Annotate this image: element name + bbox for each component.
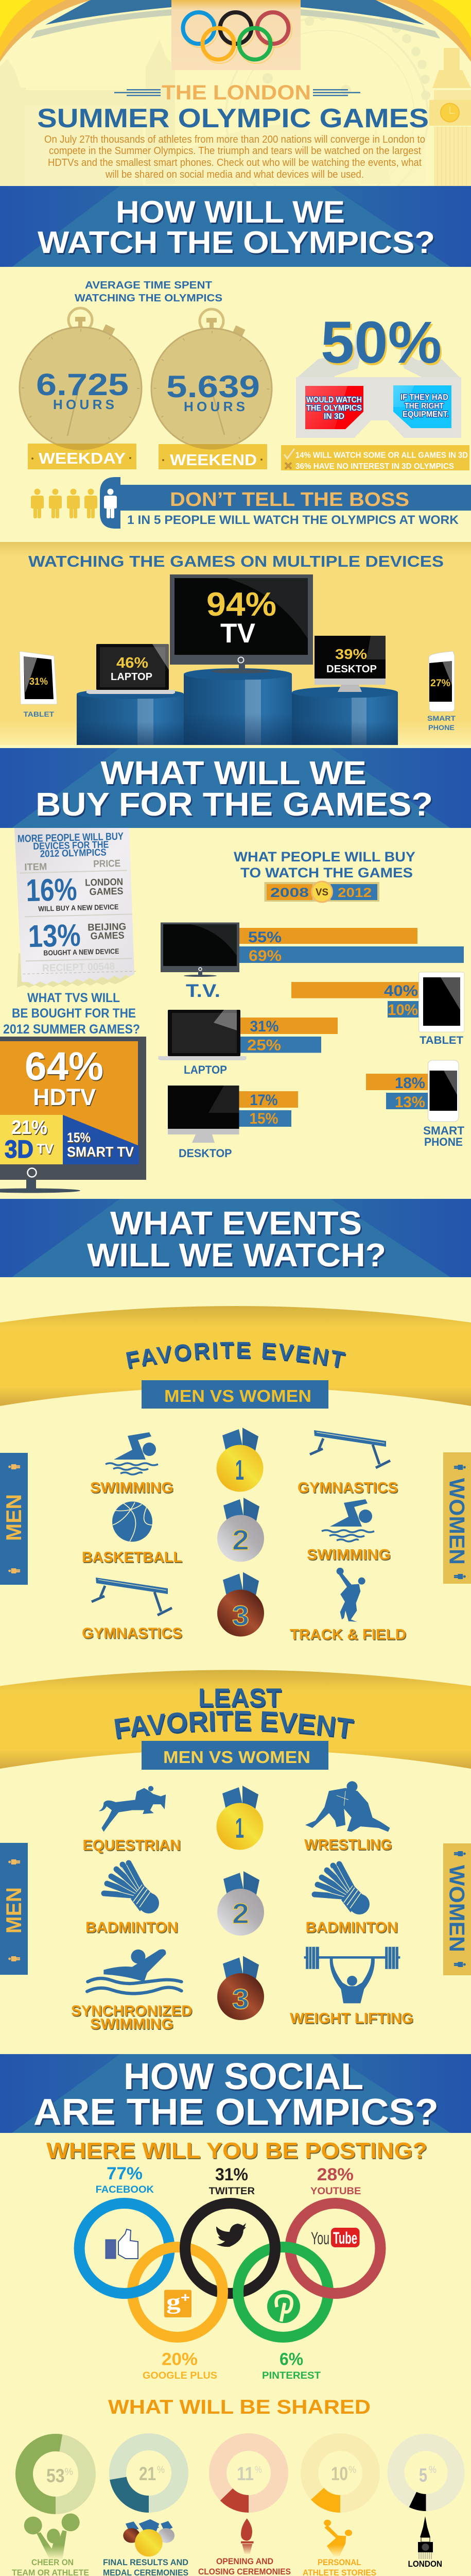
heading: favorite event: FAVORITE EVENT bbox=[126, 1342, 346, 1369]
donut: london 5%: 5 bbox=[419, 2465, 427, 2486]
intro paragraph: will be shared on social media and what devices will be used. bbox=[105, 169, 364, 180]
icon: twitter bird bbox=[216, 2223, 246, 2247]
stat: weekend hours: HOURS bbox=[184, 399, 245, 414]
bars: laptop bbox=[240, 1018, 338, 1054]
callout: don't tell the boss bbox=[100, 477, 471, 529]
receipt panel: BOUGHT A NEW DEVICE bbox=[43, 947, 119, 957]
event: men gymnastics: GYMNASTICS bbox=[82, 1625, 182, 1641]
receipt panel: GAMES bbox=[89, 886, 124, 897]
heading: what people will buy: WHAT PEOPLE WILL BUY bbox=[234, 849, 415, 865]
stat: facebook: 77% bbox=[107, 2164, 143, 2183]
icon: medals bbox=[123, 2519, 175, 2556]
event: men gymnastics bbox=[82, 1578, 182, 1641]
event: women track and field: TRACK & FIELD bbox=[290, 1626, 406, 1643]
heading: least favorite event: FAVORITE EVENT bbox=[114, 1710, 355, 1740]
bars: tablet: 40% bbox=[384, 982, 418, 999]
legend: 2008 vs 2012 bbox=[265, 882, 379, 902]
receipt panel: 13% bbox=[28, 918, 81, 954]
donut: medals 21% bbox=[117, 2442, 180, 2504]
stat: facebook bbox=[96, 2164, 154, 2195]
chart: tv types in monitor: 3D bbox=[5, 1136, 33, 1163]
event: men badminton bbox=[85, 1863, 178, 1936]
bars: desktop: 17% bbox=[250, 1092, 278, 1109]
receipt panel: GAMES bbox=[90, 930, 125, 942]
chart: tv types in monitor: 21% bbox=[11, 1117, 47, 1139]
intro paragraph: HDTVs and the smallest smart phones. Check out who will be watching the events, what bbox=[48, 157, 422, 168]
event: women gymnastics: GYMNASTICS bbox=[298, 1480, 398, 1496]
stat: 50 percent: 50% bbox=[321, 310, 442, 376]
bars: tablet: 10% bbox=[388, 1002, 418, 1019]
receipt panel: RECIEPT 00548 bbox=[42, 961, 115, 974]
icon: cheerleader bbox=[24, 2513, 80, 2560]
chart: tv types in monitor bbox=[0, 1037, 146, 1193]
device: laptop 46%: 46% bbox=[116, 655, 148, 671]
label: smart phone bbox=[427, 714, 456, 732]
device: tablet 31%: 31% bbox=[29, 676, 48, 687]
bars: laptop: 31% bbox=[250, 1018, 279, 1035]
device: desktop 39%: DESKTOP bbox=[326, 664, 377, 675]
medal: silver least favorite: 2 bbox=[232, 1897, 249, 1929]
bars: tv: 69% bbox=[249, 947, 282, 964]
donut: athlete stories 10% bbox=[309, 2442, 371, 2504]
donut: ceremonies 11%: 11 bbox=[237, 2463, 254, 2484]
device: tv 94%: 94% bbox=[206, 585, 276, 623]
label: london: LONDON bbox=[408, 2559, 442, 2569]
top curtain left bbox=[0, 0, 171, 62]
stat: youtube bbox=[310, 2165, 361, 2197]
label: cheer on team or athlete: CHEER ON bbox=[31, 2557, 74, 2567]
icon: google plus: g bbox=[166, 2291, 181, 2314]
weekday label bbox=[28, 444, 136, 469]
heading: what people will buy: TO WATCH THE GAMES bbox=[240, 865, 413, 880]
icon: facebook thumb bbox=[106, 2229, 138, 2259]
side tab: women bbox=[443, 1452, 471, 1584]
heading: average time spent: AVERAGE TIME SPENT bbox=[85, 280, 212, 291]
people icons: 1 in 5 bbox=[31, 488, 97, 518]
event: men equestrian: EQUESTRIAN bbox=[82, 1837, 181, 1854]
intro paragraph bbox=[44, 134, 425, 180]
panel: multiple devices bbox=[0, 542, 471, 745]
device: tablet bbox=[419, 972, 464, 1032]
medal: bronze least favorite bbox=[217, 1956, 264, 2020]
chart: tv types in monitor: 64% bbox=[25, 1044, 103, 1089]
stat: weekday hours: 6.725 bbox=[36, 367, 129, 402]
label: smart phone bbox=[423, 1124, 465, 1148]
medal: gold least favorite: 1 bbox=[235, 1812, 244, 1844]
stat: twitter: TWITTER bbox=[209, 2186, 255, 2197]
bars: desktop bbox=[239, 1091, 298, 1127]
label: smart phone: SMART bbox=[423, 1124, 465, 1137]
donut: london 5%: % bbox=[429, 2465, 437, 2476]
donut: cheer 53% bbox=[24, 2443, 87, 2505]
label: final results: FINAL RESULTS AND bbox=[103, 2557, 188, 2567]
red lens text: IN 3D bbox=[324, 412, 344, 421]
bars: smart phone: 18% bbox=[395, 1075, 425, 1092]
device: smart phone 27%: 27% bbox=[430, 678, 450, 689]
blue lens text: THE RIGHT bbox=[405, 402, 444, 411]
blue lens text bbox=[400, 393, 449, 419]
heading: what tvs will be bought bbox=[3, 991, 140, 1037]
device: desktop bbox=[168, 1086, 239, 1143]
device: laptop bbox=[159, 1010, 246, 1060]
stat: weekday hours bbox=[36, 367, 129, 412]
event: men synchronized swimming: SWIMMING bbox=[90, 2016, 173, 2032]
receipt panel: BEIJING bbox=[88, 922, 126, 933]
donut: cheer 53%: 53 bbox=[46, 2465, 65, 2486]
red lens text: THE OLYMPICS bbox=[306, 404, 362, 413]
receipt panel: 16% bbox=[26, 872, 77, 908]
icon: youtube logo: You bbox=[311, 2229, 329, 2248]
donut: medals 21%: % bbox=[157, 2465, 165, 2476]
label: tablet: TABLET bbox=[24, 710, 54, 718]
banner: what events: WHAT EVENTS bbox=[110, 1205, 362, 1242]
podium: tv cylinder bbox=[184, 668, 292, 745]
device: tablet 31% bbox=[20, 651, 57, 704]
medal: gold least favorite bbox=[216, 1786, 264, 1850]
medal: silver least favorite bbox=[217, 1871, 264, 1936]
chart: tv types in monitor: HDTV bbox=[33, 1084, 96, 1110]
label: t.v.: T.V. bbox=[186, 981, 220, 1001]
arc band: favorite event bbox=[0, 1306, 471, 1406]
stat: facebook: FACEBOOK bbox=[96, 2184, 154, 2195]
device: smart phone 27% bbox=[429, 651, 455, 711]
donut: london 5% bbox=[396, 2442, 456, 2503]
banner: how social: ARE THE OLYMPICS? bbox=[33, 2092, 439, 2133]
device: desktop 39% bbox=[315, 636, 386, 692]
donut: ceremonies 11%: % bbox=[255, 2465, 262, 2476]
side tab: men: MEN bbox=[2, 1887, 26, 1934]
banner: how will we watch bbox=[0, 186, 471, 267]
event: women wrestling bbox=[304, 1781, 392, 1853]
bars: laptop: 25% bbox=[247, 1037, 281, 1054]
label: smart phone: SMART bbox=[427, 714, 456, 722]
banner: how social bbox=[0, 2054, 471, 2133]
stat: weekend hours bbox=[166, 369, 260, 414]
device: tv 94%: TV bbox=[220, 618, 255, 649]
device: tv 94% bbox=[170, 574, 313, 673]
3d stats box: 36% HAVE NO INTEREST IN 3D OLYMPICS bbox=[295, 462, 454, 471]
stat: google plus bbox=[143, 2349, 217, 2381]
side tab: men bbox=[0, 1453, 28, 1585]
bars: smart phone: 13% bbox=[395, 1094, 425, 1111]
chart: tv types in monitor: SMART TV bbox=[67, 1144, 134, 1160]
label: opening and closing: OPENING AND bbox=[216, 2556, 273, 2566]
stat: youtube: 28% bbox=[317, 2165, 354, 2184]
stopwatch: weekend bbox=[151, 309, 272, 449]
icon: discus athlete bbox=[324, 2520, 352, 2557]
label: smart phone: PHONE bbox=[428, 723, 455, 732]
title: summer olympic games: SUMMER OLYMPIC GAMES bbox=[37, 104, 429, 133]
receipt panel: PRICE bbox=[93, 858, 120, 870]
label: personal athlete stories: PERSONAL bbox=[318, 2557, 361, 2567]
label: cheer on team or athlete bbox=[12, 2557, 89, 2576]
receipt panel: DEVICES FOR THE bbox=[33, 839, 109, 852]
banner: what will we buy: WHAT WILL WE bbox=[101, 754, 367, 791]
intro paragraph: On July 27th thousands of athletes from more than 200 nations will converge in London to bbox=[44, 134, 425, 145]
big ben silhouette bbox=[429, 48, 471, 186]
event: men equestrian bbox=[82, 1786, 181, 1854]
side tab: women: WOMEN bbox=[445, 1478, 469, 1565]
medal: gold favorite bbox=[216, 1428, 264, 1492]
banner: how will we watch: HOW WILL WE bbox=[116, 195, 345, 229]
intro paragraph: compete in the Summer Olympics. The triumph and tears will be watched on the largest bbox=[49, 145, 421, 157]
device: laptop 46% bbox=[86, 644, 175, 694]
stat: youtube: YOUTUBE bbox=[310, 2186, 361, 2197]
medal: bronze favorite bbox=[217, 1572, 264, 1636]
heading: what tvs will be bought: WHAT TVS WILL bbox=[27, 991, 120, 1005]
receipt panel: 2012 OLYMPICS bbox=[40, 847, 107, 860]
stat: google plus: GOOGLE PLUS bbox=[143, 2370, 217, 2381]
banner: what events: WILL WE WATCH? bbox=[87, 1236, 386, 1274]
event: women swimming bbox=[307, 1499, 391, 1563]
icon: big ben bbox=[418, 2516, 433, 2559]
heading: least favorite event: LEAST bbox=[198, 1683, 282, 1712]
bars: desktop: 15% bbox=[249, 1110, 278, 1127]
banner: how social: HOW SOCIAL bbox=[124, 2056, 363, 2097]
event: men swimming: SWIMMING bbox=[90, 1480, 173, 1496]
label: personal athlete stories bbox=[303, 2557, 376, 2576]
stat: twitter bbox=[209, 2165, 255, 2197]
icon: torch bbox=[239, 2518, 255, 2555]
red lens text: WOULD WATCH bbox=[306, 396, 362, 404]
event: women swimming: SWIMMING bbox=[307, 1547, 391, 1563]
heading: average time spent bbox=[75, 280, 222, 304]
olympic flag panel bbox=[171, 0, 301, 70]
medal: bronze favorite: 3 bbox=[232, 1600, 249, 1632]
stopwatch: weekday bbox=[20, 308, 142, 449]
donut: athlete stories 10%: 10 bbox=[331, 2463, 348, 2484]
medal: bronze least favorite: 3 bbox=[232, 1983, 249, 2015]
chart: olympic rings social shares bbox=[79, 2203, 380, 2337]
legend: 2008 vs 2012: 2012 bbox=[338, 886, 372, 900]
callout: don't tell the boss: 1 IN 5 PEOPLE WILL WATCH THE OLYMPICS AT WORK bbox=[127, 513, 459, 527]
weekday label: WEEKDAY bbox=[39, 449, 126, 467]
icon: 3d glasses bbox=[296, 330, 461, 438]
bars: tablet bbox=[291, 982, 419, 1019]
medal: silver favorite: 2 bbox=[232, 1524, 249, 1556]
podium: desktop cylinder bbox=[292, 687, 398, 745]
tag: men vs women bbox=[142, 1741, 328, 1770]
device: tv bbox=[161, 922, 239, 977]
stat: pinterest bbox=[262, 2349, 321, 2381]
bars: tv: 55% bbox=[248, 929, 282, 946]
event: women badminton: BADMINTON bbox=[306, 1920, 398, 1936]
device: smart phone bbox=[428, 1060, 459, 1122]
3d stats box bbox=[281, 445, 469, 471]
stat: weekend hours: 5.639 bbox=[166, 369, 260, 404]
chart: tv types in monitor: 15% bbox=[67, 1130, 91, 1145]
weekend label: WEEKEND bbox=[170, 451, 257, 469]
label: smart phone: PHONE bbox=[424, 1136, 463, 1148]
event: women weight lifting bbox=[290, 1947, 413, 2027]
banner: what will we buy bbox=[0, 748, 471, 828]
title: the london: THE LONDON bbox=[162, 81, 311, 104]
callout: don't tell the boss: DON’T TELL THE BOSS bbox=[170, 489, 409, 511]
tag: men vs women bbox=[142, 1380, 328, 1409]
legend: 2008 vs 2012: VS bbox=[316, 887, 328, 898]
banner: how will we watch: WATCH THE OLYMPICS? bbox=[38, 225, 435, 260]
blue lens text: IF THEY HAD bbox=[400, 393, 448, 402]
event: men badminton: BADMINTON bbox=[85, 1920, 178, 1936]
event: men synchronized swimming: SYNCHRONIZED bbox=[71, 2003, 193, 2020]
label: opening and closing bbox=[198, 2556, 291, 2576]
heading: where will you be posting: WHERE WILL YOU BE POSTING? bbox=[46, 2138, 427, 2163]
blue lens text: EQUIPMENT. bbox=[403, 410, 449, 419]
receipt panel: ITEM bbox=[24, 861, 47, 873]
donut: medals 21%: 21 bbox=[139, 2463, 156, 2484]
stat: weekday hours: HOURS bbox=[53, 397, 114, 412]
medal: gold favorite: 1 bbox=[235, 1454, 244, 1486]
stat: pinterest: PINTEREST bbox=[262, 2370, 321, 2381]
icon: youtube logo bbox=[311, 2228, 359, 2248]
icon: google plus: + bbox=[181, 2290, 190, 2305]
stat: pinterest: 6% bbox=[280, 2349, 303, 2369]
legend: 2008 vs 2012: 2008 bbox=[270, 886, 309, 900]
event: women track and field bbox=[290, 1568, 406, 1643]
label: final results bbox=[103, 2557, 188, 2576]
side tab: women bbox=[443, 1843, 471, 1975]
bars: smart phone bbox=[366, 1074, 428, 1111]
event: men basketball: BASKETBALL bbox=[82, 1549, 182, 1566]
icon: youtube logo: Tube bbox=[333, 2229, 357, 2247]
title rule lines bbox=[114, 89, 360, 96]
podium: laptop cylinder bbox=[77, 689, 184, 745]
side tab: women: WOMEN bbox=[445, 1865, 469, 1952]
event: men basketball bbox=[82, 1501, 182, 1566]
event: women weight lifting: WEIGHT LIFTING bbox=[290, 2010, 413, 2027]
receipt panel bbox=[14, 828, 136, 988]
side tab: men: MEN bbox=[2, 1494, 26, 1541]
chart: tv types in monitor: TV bbox=[37, 1141, 54, 1157]
device: laptop 46%: LAPTOP bbox=[111, 671, 152, 683]
icon: pinterest bbox=[267, 2290, 300, 2323]
event: women badminton bbox=[306, 1864, 398, 1936]
banner: what will we buy: BUY FOR THE GAMES? bbox=[36, 786, 433, 823]
event: men swimming bbox=[90, 1432, 173, 1496]
stat: google plus: 20% bbox=[162, 2349, 198, 2369]
tag: men vs women: MEN VS WOMEN bbox=[163, 1748, 310, 1767]
label: desktop: DESKTOP bbox=[179, 1147, 232, 1160]
medal: silver favorite bbox=[217, 1498, 264, 1562]
top curtain right bbox=[301, 0, 471, 62]
heading: what tvs will be bought: 2012 SUMMER GAMES? bbox=[3, 1022, 140, 1037]
weekend label bbox=[159, 444, 267, 469]
donut: cheer 53%: % bbox=[65, 2467, 73, 2478]
receipt panel: MORE PEOPLE WILL BUY bbox=[18, 831, 124, 845]
header panel: London skyline backdrop bbox=[0, 12, 430, 215]
event: women gymnastics bbox=[298, 1430, 398, 1496]
arc band: least favorite event bbox=[0, 1670, 471, 1769]
label: laptop: LAPTOP bbox=[184, 1063, 227, 1076]
donut: athlete stories 10%: % bbox=[348, 2465, 356, 2476]
icon: google plus bbox=[164, 2290, 191, 2317]
label: tablet: TABLET bbox=[420, 1035, 463, 1046]
event: women wrestling: WRESTLING bbox=[304, 1837, 392, 1853]
receipt panel: WILL BUY A NEW DEVICE bbox=[38, 903, 118, 913]
event: men synchronized swimming bbox=[71, 1950, 193, 2032]
olympic rings logo bbox=[183, 12, 292, 63]
banner: what events bbox=[0, 1199, 471, 1277]
heading: multiple devices: WATCHING THE GAMES ON MULTIPLE DEVICES bbox=[28, 552, 444, 570]
bars: tv bbox=[239, 928, 464, 964]
heading: what people will buy bbox=[234, 849, 415, 880]
heading: average time spent: WATCHING THE OLYMPICS bbox=[75, 293, 222, 304]
heading: what will be shared: WHAT WILL BE SHARED bbox=[108, 2396, 371, 2418]
heading: least favorite event bbox=[114, 1683, 355, 1740]
receipt panel: LONDON bbox=[85, 877, 123, 888]
donut: ceremonies 11% bbox=[218, 2442, 280, 2504]
red lens text bbox=[306, 396, 362, 421]
heading: what tvs will be bought: BE BOUGHT FOR THE bbox=[12, 1006, 136, 1021]
stat: twitter: 31% bbox=[215, 2165, 248, 2184]
tag: men vs women: MEN VS WOMEN bbox=[164, 1386, 311, 1405]
side tab: men bbox=[0, 1843, 28, 1975]
device: desktop 39%: 39% bbox=[335, 646, 367, 662]
